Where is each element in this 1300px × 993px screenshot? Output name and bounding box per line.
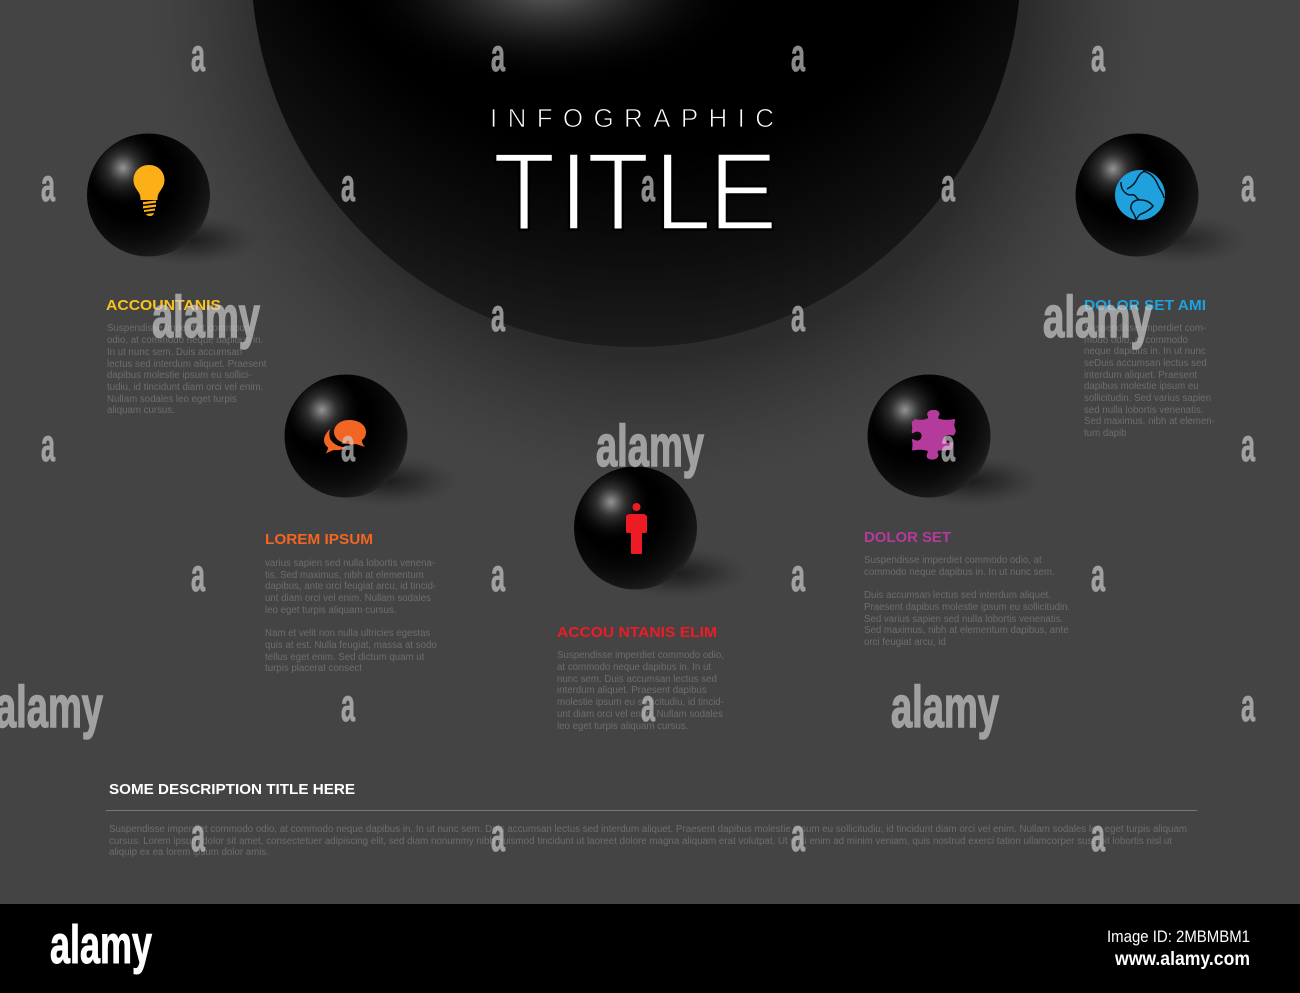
- text block: [107, 323, 267, 416]
- text block: lectus sed interdum aliquet. Praesent: [107, 359, 267, 370]
- step 5: dolor set ami: [1076, 134, 1226, 438]
- watermarks: alamy: [1043, 285, 1152, 350]
- watermarks: a: [791, 29, 805, 81]
- description text: Suspendisse imperdiet commodo odio, at commodo neque dapibus in. In ut nunc sem. Duis accumsan lectus sed interdum aliquet. Praesent dapibus molestie ipsum eu sollicitudiu, id tincidunt diam orci vel enim. Nullam sodales leo eget turpis aliquam: [109, 824, 1187, 835]
- text block: aliquam cursus.: [107, 405, 175, 416]
- text block: Sed maximus, nibh at elemen-: [1084, 416, 1215, 427]
- heading: ACCOU NTANIS ELIM: [557, 624, 717, 641]
- text block: Sed varius sapien sed nulla lobortis venenatis.: [864, 614, 1063, 625]
- text block: sed nulla lobortis venenatis.: [1084, 405, 1204, 416]
- text block: [265, 558, 437, 674]
- watermarks: a: [641, 159, 655, 211]
- text block: at commodo neque dapibus in. In ut: [557, 662, 711, 673]
- watermarks: a: [941, 419, 955, 471]
- text block: odio, at commodo neque dapibus in.: [107, 335, 263, 346]
- text block: [864, 555, 1070, 648]
- watermarks: a: [791, 289, 805, 341]
- footer bar: [0, 904, 1300, 993]
- sphere 1: [85, 130, 210, 256]
- watermarks: a: [41, 419, 55, 471]
- description text: cursus. Lorem ipsum dolor sit amet, consectetuer adipiscing elit, sed diam nonummy nibh euismod tincidunt ut laoreet dolore magna aliquam erat volutpat. Ut wisi enim ad minim veniam, quis nostrud exerci tation ullamcorper suscipit lobortis nisl ut: [109, 836, 1172, 847]
- text block: interdum aliquet. Praesent dapibus: [557, 685, 707, 696]
- text block: varius sapien sed nulla lobortis venena-: [265, 558, 435, 569]
- big sphere: [251, 0, 1021, 347]
- text block: turpis placerat consect: [265, 663, 362, 674]
- watermarks: a: [1241, 159, 1255, 211]
- icon: light bulb: [134, 165, 164, 216]
- watermarks: a: [191, 549, 205, 601]
- sphere 4 shadow: [899, 455, 1043, 507]
- sphere 3: [573, 464, 697, 590]
- sphere 2: [284, 372, 408, 498]
- step 1: accountanis: [85, 130, 267, 416]
- step 4: dolor set: [864, 372, 1070, 648]
- text block: leo eget turpis aliquam cursus.: [557, 721, 688, 732]
- watermarks: a: [341, 679, 355, 731]
- text block: nunc sem. Duis accumsan lectus sed: [557, 674, 717, 685]
- text block: Suspendisse imperdiet commodo odio,: [557, 650, 724, 661]
- text block: dapibus molestie ipsum eu sollici-: [107, 370, 251, 381]
- heading: DOLOR SET: [864, 529, 951, 546]
- watermarks: a: [491, 809, 505, 861]
- text block: Nam et velit non nulla ultricies egestas: [265, 628, 430, 639]
- sphere 2 shadow: [316, 455, 460, 507]
- watermarks: a: [491, 549, 505, 601]
- watermarks: a: [941, 159, 955, 211]
- text block: Sed maximus, nibh at elementum dapibus, ante: [864, 625, 1069, 636]
- title: INFOGRAPHIC: INFOGRAPHIC: [490, 103, 774, 133]
- sphere 3 shadow: [606, 547, 750, 599]
- text block: Duis accumsan lectus sed interdum aliquet.: [864, 590, 1051, 601]
- icon: speech bubbles: [324, 420, 366, 454]
- title: TITLE: TITLE: [493, 130, 777, 253]
- watermarks: a: [341, 159, 355, 211]
- description text: [109, 824, 1187, 858]
- website: www.alamy.com: [1114, 949, 1250, 970]
- icon: puzzle piece: [912, 410, 956, 460]
- watermarks: a: [791, 809, 805, 861]
- text block: [557, 650, 724, 732]
- watermarks: alamy: [596, 414, 704, 479]
- text block: Praesent dapibus molestie ipsum eu sollicitudin.: [864, 602, 1070, 613]
- step 3: accou ntanis elim: [557, 466, 728, 731]
- text block: quis at est. Nulla feugiat, massa at sodo: [265, 640, 437, 651]
- big sphere shadow: [140, 0, 1160, 490]
- text block: seDuis accumsan lectus sed: [1084, 358, 1207, 369]
- watermarks: a: [491, 289, 505, 341]
- description panel: [106, 782, 1197, 858]
- text block: tum dapib: [1084, 428, 1127, 439]
- watermarks: a: [791, 549, 805, 601]
- text block: sollicitudin. Sed varius sapien: [1084, 393, 1211, 404]
- watermarks: a: [191, 809, 205, 861]
- watermarks: alamy: [152, 285, 260, 350]
- text block: commodo neque dapibus in. In ut nunc sem.: [864, 567, 1055, 578]
- sphere 5 shadow: [1107, 214, 1251, 266]
- text block: dapibus molestie ipsum eu: [1084, 381, 1199, 392]
- icon: globe: [1115, 170, 1165, 220]
- text block: tudiu, id tincidunt diam orci vel enim.: [107, 382, 263, 393]
- text block: dapibus, ante orci feugiat arcu, id tincid-: [265, 581, 436, 592]
- sphere 1 shadow: [118, 214, 262, 266]
- watermarks: a: [1091, 29, 1105, 81]
- text block: Suspendisse imperdiet commodo: [107, 323, 250, 334]
- text block: orci feugiat arcu, id: [864, 637, 946, 648]
- text block: tis. Sed maximus, nibh at elementum: [265, 570, 424, 581]
- image id: Image ID: 2MBMBM1: [1107, 927, 1250, 946]
- icon: person: [626, 503, 647, 554]
- watermarks: a: [191, 29, 205, 81]
- text block: interdum aliquet. Praesent: [1084, 370, 1197, 381]
- watermarks: a: [1091, 809, 1105, 861]
- watermarks: a: [41, 159, 55, 211]
- description text: aliquip ex ea lorem ipsum dolor amis.: [109, 847, 269, 858]
- sphere 5: [1075, 131, 1198, 256]
- heading: ACCOUNTANIS: [106, 297, 221, 314]
- watermarks: a: [341, 419, 355, 471]
- text block: Suspendisse imperdiet com-: [1084, 323, 1206, 334]
- text block: unt diam orci vel enim. Nullam sodales: [265, 593, 431, 604]
- text block: Suspendisse imperdiet commodo odio, at: [864, 555, 1042, 566]
- watermarks: a: [1241, 679, 1255, 731]
- watermarks: a: [491, 29, 505, 81]
- text block: modo odio, at commodo: [1084, 335, 1188, 346]
- text block: In ut nunc sem. Duis accumsan: [107, 347, 242, 358]
- step 2: lorem ipsum: [265, 374, 438, 673]
- description heading: SOME DESCRIPTION TITLE HERE: [109, 782, 355, 798]
- footer logo: alamy: [50, 915, 152, 975]
- watermarks: alamy: [891, 675, 999, 740]
- text block: tellus eget enim. Sed dictum quam ut: [265, 652, 425, 663]
- watermarks: a: [1241, 419, 1255, 471]
- text block: unt diam orci vel enim. Nullam sodales: [557, 709, 723, 720]
- text block: molestie ipsum eu sollicitudiu, id tincid-: [557, 697, 724, 708]
- text block: leo eget turpis aliquam cursus.: [265, 605, 396, 616]
- heading: LOREM IPSUM: [265, 531, 373, 548]
- watermarks: a: [641, 679, 655, 731]
- heading: DOLOR SET AMI: [1084, 297, 1206, 314]
- text block: Nullam sodales leo eget turpis: [107, 394, 237, 405]
- text block: [1084, 323, 1215, 439]
- watermarks: a: [1091, 549, 1105, 601]
- text block: neque dapibus in. In ut nunc: [1084, 346, 1206, 357]
- sphere 4: [867, 372, 990, 498]
- title: [490, 103, 777, 253]
